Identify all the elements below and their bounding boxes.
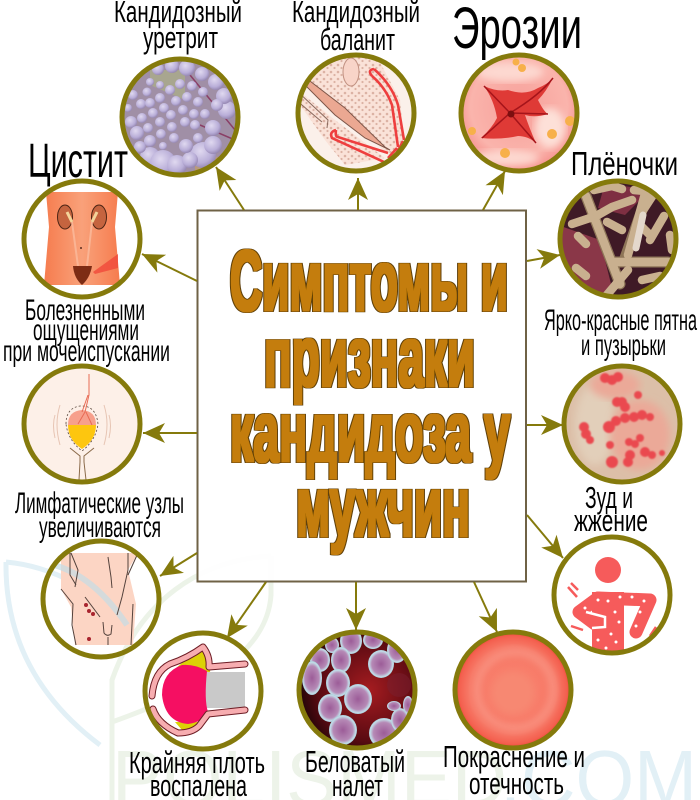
illustration: erosion (464, 58, 574, 168)
ring (24, 181, 140, 297)
label: баланит (320, 22, 395, 57)
label (3, 294, 170, 368)
label: Беловатый (305, 744, 405, 779)
label: отечность (469, 766, 564, 800)
label: Цистит (28, 135, 128, 188)
watermark: polismed logo (6, 556, 697, 800)
ring (554, 537, 670, 653)
label: увеличиваются (39, 511, 161, 544)
photo: cells (302, 634, 412, 746)
illustration: anatomy section (300, 58, 412, 168)
arrow (143, 432, 197, 434)
label: уретрит (143, 20, 218, 55)
arrow (527, 515, 563, 558)
label: Крайняя плоть (129, 745, 265, 780)
label: Зуд и (585, 480, 633, 515)
photo: bubbles (124, 62, 236, 172)
ring (43, 541, 159, 657)
label: жжение (574, 503, 648, 538)
panel: Цистит (24, 135, 197, 297)
panel: Зуд и жжение (527, 480, 672, 662)
icon: scratching person (567, 557, 657, 650)
label (114, 0, 242, 55)
panel: Ярко-красные пятна и пузырьки (527, 304, 697, 484)
title (230, 234, 510, 555)
label: Болезненными (25, 294, 145, 327)
illustration: body (54, 552, 137, 646)
label (292, 0, 420, 57)
photo: rods (562, 184, 674, 294)
title: мужчин (296, 460, 470, 555)
arrow (527, 255, 560, 261)
label (305, 744, 405, 800)
illustration: inflamed foreskin (148, 644, 248, 736)
panel: Кандидозный баланит (292, 0, 420, 210)
arrow (160, 553, 197, 576)
ring (455, 632, 571, 748)
panel: Крайняя плоть воспалена (129, 582, 266, 800)
ring (564, 366, 680, 482)
arrow (355, 582, 357, 630)
panel: Плёночки (527, 145, 678, 300)
label: при мочеиспускании (3, 335, 170, 368)
label: Покраснение и (443, 739, 585, 774)
label: ощущениями (33, 314, 139, 347)
label (129, 745, 265, 800)
illustration: bladder (26, 368, 138, 480)
ring (24, 366, 140, 482)
arrow (216, 167, 244, 210)
panel: Беловатый налет (297, 582, 417, 800)
panel: Покраснение и отечность (443, 582, 585, 800)
title: признаки (264, 310, 475, 405)
illustration: red cell (458, 634, 568, 746)
photo: skin rash (566, 368, 678, 480)
panel: Эрозии (452, 0, 582, 210)
ring (298, 55, 414, 171)
ring (122, 59, 238, 175)
label: Лимфатические узлы (15, 487, 184, 520)
panel: Болезненными ощущениями при мочеиспускании (3, 294, 197, 484)
label (574, 480, 648, 538)
label (544, 304, 697, 362)
arrow (527, 424, 563, 426)
arrow (357, 178, 359, 210)
ring (145, 633, 261, 749)
central panel (198, 210, 526, 582)
arrow (227, 582, 266, 638)
panel: Кандидозный уретрит (114, 0, 244, 210)
ring (461, 55, 577, 171)
label (15, 487, 184, 544)
illustration: kidneys (44, 192, 120, 285)
label (443, 739, 585, 800)
arrow (142, 254, 197, 281)
arrow (483, 171, 505, 210)
panel: Лимфатические узлы увеличиваются (15, 487, 197, 657)
ring (299, 632, 415, 748)
arrow (474, 582, 497, 632)
ring (560, 181, 676, 297)
